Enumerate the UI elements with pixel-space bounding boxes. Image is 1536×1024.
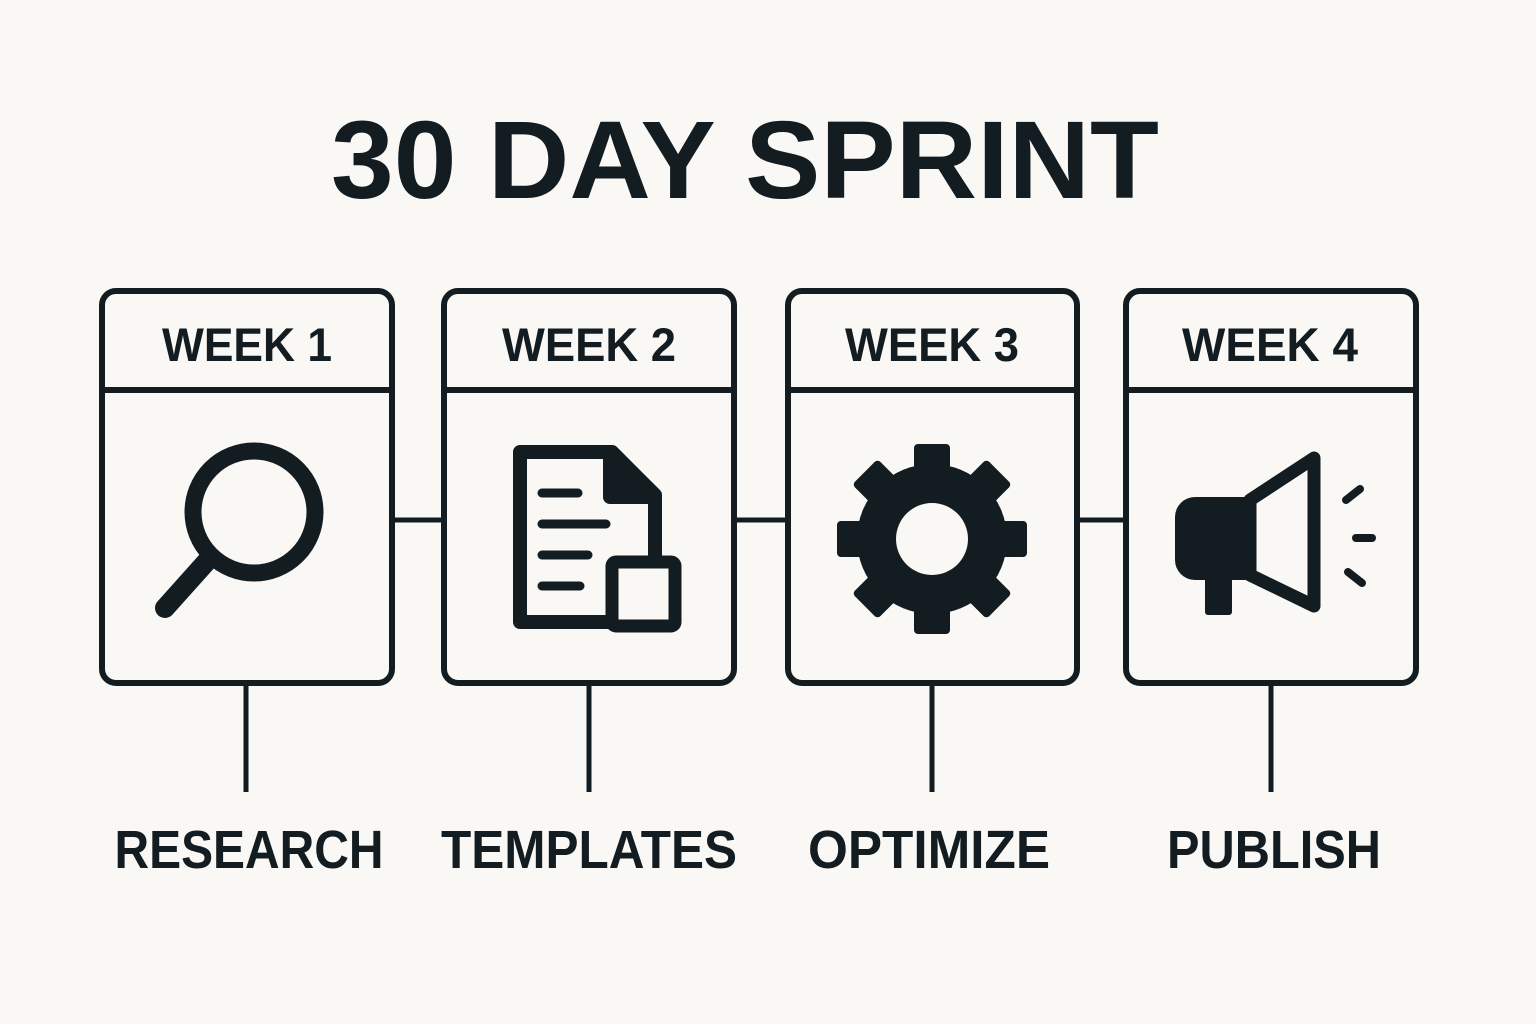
panel: week 2 xyxy=(444,291,734,683)
panel: week 4: WEEK 4 xyxy=(1182,318,1358,371)
panel: week 4 xyxy=(1126,291,1416,683)
panel: week 1 xyxy=(102,291,392,683)
labels: OPTIMIZE xyxy=(808,820,1050,880)
labels: TEMPLATES xyxy=(441,820,737,880)
panel: week 3: WEEK 3 xyxy=(845,318,1019,371)
title: 30 DAY SPRINT xyxy=(331,99,1159,222)
connectors xyxy=(246,520,1271,792)
icon: megaphone xyxy=(1175,458,1372,615)
icon: gear xyxy=(837,444,1027,634)
panel: week 2: WEEK 2 xyxy=(502,318,676,371)
icon: document xyxy=(520,452,675,626)
labels: PUBLISH xyxy=(1167,820,1381,880)
labels: RESEARCH xyxy=(114,820,384,880)
panel: week 3 xyxy=(788,291,1077,683)
panel: week 1: WEEK 1 xyxy=(162,318,332,371)
icon: magnifier xyxy=(165,451,315,608)
labels xyxy=(114,820,1381,880)
